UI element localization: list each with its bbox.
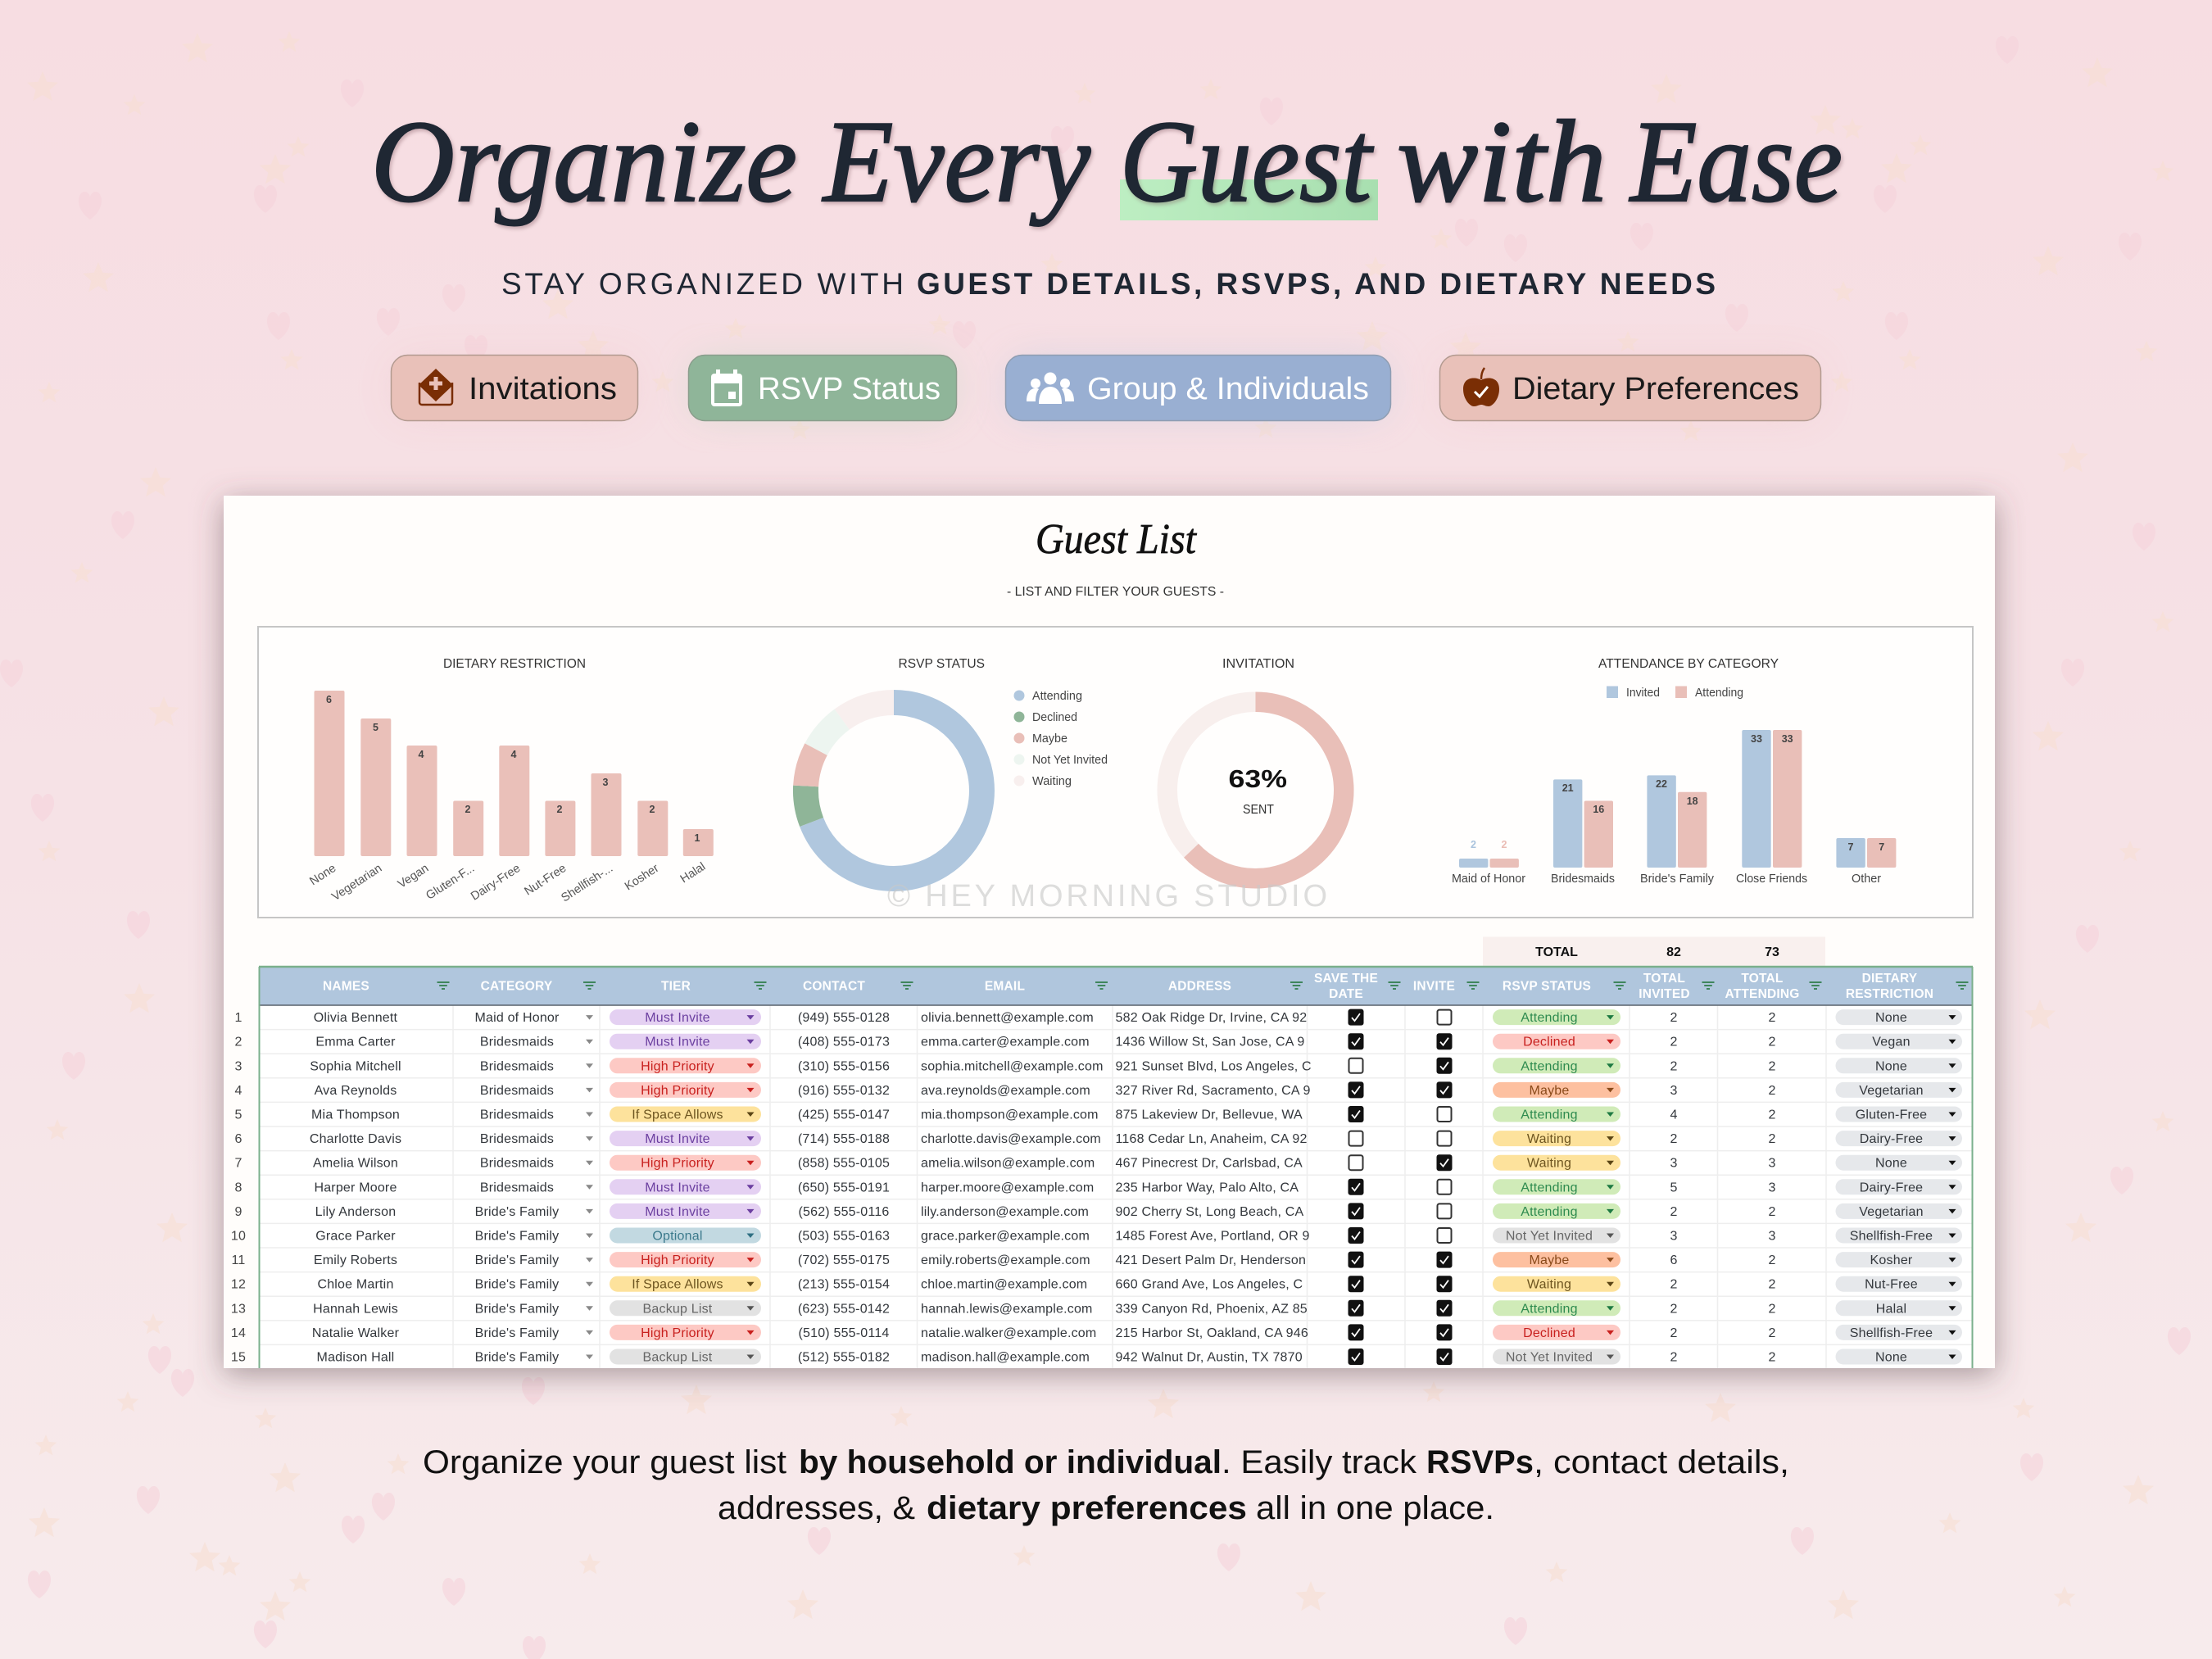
row 8: 235 Harbor Way, Palo Alto, CA xyxy=(1116,1181,1299,1194)
row 5: 2 xyxy=(1768,1108,1776,1122)
table header: NAMES xyxy=(323,980,369,993)
row 11: Bride's Family xyxy=(475,1253,559,1267)
title: Every xyxy=(822,97,1091,226)
row 7: Waiting xyxy=(1527,1157,1571,1171)
row 7: 467 Pinecrest Dr, Carlsbad, CA xyxy=(1116,1157,1303,1171)
bar chart: attendance by category: 22 xyxy=(1656,778,1667,790)
row 3: 3 xyxy=(234,1059,243,1073)
row 9: Attending xyxy=(1521,1205,1578,1219)
bottom description: dietary preferences xyxy=(927,1490,1247,1526)
bar chart: attendance by category: 2 xyxy=(1471,839,1476,850)
row 15: (512) 555-0182 xyxy=(798,1350,890,1365)
row 15: 2 xyxy=(1768,1350,1776,1365)
totals row xyxy=(1483,937,1825,965)
row 7: 3 xyxy=(1670,1157,1678,1171)
row 11: 11 xyxy=(231,1253,246,1267)
row 13: Hannah Lewis xyxy=(313,1302,398,1316)
table xyxy=(231,967,1973,1368)
row 11: 421 Desert Palm Dr, Henderson xyxy=(1116,1253,1306,1267)
sheet title: Guest List xyxy=(1036,516,1197,563)
row 11: Emily Roberts xyxy=(314,1253,397,1267)
bar chart: dietary restriction: 3 xyxy=(603,777,609,788)
row 14: natalie.walker@example.com xyxy=(921,1326,1096,1340)
row 13: 339 Canyon Rd, Phoenix, AZ 85 xyxy=(1116,1302,1308,1316)
row 3: 2 xyxy=(1768,1059,1776,1073)
row 3: None xyxy=(1875,1059,1907,1073)
row 15: madison.hall@example.com xyxy=(921,1350,1090,1365)
row 14: 215 Harbor St, Oakland, CA 946 xyxy=(1116,1326,1308,1340)
bar chart: attendance by category: Maid of Honor xyxy=(1452,872,1525,886)
row 14: Bride's Family xyxy=(475,1326,559,1340)
row 5: If Space Allows xyxy=(632,1108,723,1122)
donut chart: RSVP status: RSVP STATUS xyxy=(898,657,985,671)
row 2: 1436 Willow St, San Jose, CA 9 xyxy=(1116,1036,1304,1049)
table header: TOTAL xyxy=(1741,972,1784,986)
row 4: 4 xyxy=(234,1084,243,1098)
row 5: mia.thompson@example.com xyxy=(921,1108,1099,1122)
row 14: High Priority xyxy=(641,1326,714,1340)
icon: envelope xyxy=(419,369,453,405)
donut chart: RSVP status xyxy=(805,657,1108,878)
bottom description: , contact details, xyxy=(1534,1444,1789,1480)
row 11: (702) 555-0175 xyxy=(798,1253,890,1267)
button: Group & Individuals: Group & Individuals xyxy=(1087,372,1369,406)
bar chart: dietary restriction: Nut-Free xyxy=(522,862,569,899)
row 3 xyxy=(234,1058,1962,1074)
row 6: Charlotte Davis xyxy=(310,1132,401,1146)
row 10: 10 xyxy=(231,1229,246,1244)
row 3: High Priority xyxy=(641,1059,714,1073)
row 2: Bridesmaids xyxy=(480,1036,554,1049)
row 6: Bridesmaids xyxy=(480,1132,554,1146)
bar chart: attendance by category: Close Friends xyxy=(1736,872,1807,886)
row 12 xyxy=(231,1276,1962,1292)
row 6: Dairy-Free xyxy=(1860,1132,1923,1146)
row 5: Bridesmaids xyxy=(480,1108,554,1122)
row 15: None xyxy=(1875,1350,1907,1365)
row 6: 1168 Cedar Ln, Anaheim, CA 92 xyxy=(1116,1132,1308,1146)
row 11 xyxy=(231,1252,1962,1268)
row 5: 875 Lakeview Dr, Bellevue, WA xyxy=(1116,1108,1303,1122)
bar chart: dietary restriction: Vegetarian xyxy=(329,862,384,904)
row 7: amelia.wilson@example.com xyxy=(921,1157,1095,1171)
subtitle xyxy=(501,267,1716,301)
bar chart: attendance by category xyxy=(1452,657,1896,886)
table header: CONTACT xyxy=(803,980,865,993)
totals row: TOTAL xyxy=(1535,945,1578,959)
donut chart: invitation: SENT xyxy=(1243,803,1274,817)
row 12: 12 xyxy=(231,1278,246,1292)
table header xyxy=(259,967,1973,1005)
row 15: 2 xyxy=(1670,1350,1678,1365)
table header: DATE xyxy=(1329,987,1363,1001)
row 12: chloe.martin@example.com xyxy=(921,1278,1087,1292)
bar chart: dietary restriction: Dairy-Free xyxy=(469,862,523,904)
donut chart: invitation: INVITATION xyxy=(1222,657,1294,671)
legend: RSVP status: Declined xyxy=(1032,711,1077,724)
row 8 xyxy=(234,1179,1962,1195)
row 9: lily.anderson@example.com xyxy=(921,1205,1089,1219)
row 10: Not Yet Invited xyxy=(1506,1229,1593,1244)
row 10: Bride's Family xyxy=(475,1229,559,1244)
bar chart: dietary restriction: 6 xyxy=(326,694,332,705)
row 5: Attending xyxy=(1521,1108,1578,1122)
row 14 xyxy=(231,1324,1962,1340)
row 9 xyxy=(234,1203,1962,1219)
row 6: (714) 555-0188 xyxy=(798,1132,890,1146)
row 3: sophia.mitchell@example.com xyxy=(921,1059,1104,1073)
row 2: Emma Carter xyxy=(315,1036,396,1049)
bar chart: attendance by category: ATTENDANCE BY CATEGORY xyxy=(1598,657,1779,671)
bottom description xyxy=(423,1444,1789,1526)
row 8: 8 xyxy=(234,1181,243,1194)
bar chart: attendance by category: 33 xyxy=(1782,733,1793,745)
watermark: © HEY MORNING STUDIO xyxy=(887,879,1327,913)
bar chart: attendance by category: 16 xyxy=(1593,804,1604,815)
row 15: Madison Hall xyxy=(317,1350,394,1365)
bar chart: dietary restriction: 2 xyxy=(557,804,563,815)
legend: attendance: Attending xyxy=(1695,687,1743,700)
row 9: Bride's Family xyxy=(475,1205,559,1219)
row 1 xyxy=(234,1009,1962,1026)
row 15: Backup List xyxy=(643,1350,713,1365)
bar chart: dietary restriction: 4 xyxy=(419,749,424,760)
row 6: Waiting xyxy=(1527,1132,1571,1146)
row 9: 9 xyxy=(234,1205,243,1219)
row 11: High Priority xyxy=(641,1253,714,1267)
row 12: Chloe Martin xyxy=(317,1278,394,1292)
row 9: Lily Anderson xyxy=(315,1205,396,1219)
row 8: 3 xyxy=(1768,1181,1776,1194)
row 14: Natalie Walker xyxy=(312,1326,400,1340)
legend: RSVP status: Not Yet Invited xyxy=(1032,754,1108,767)
row 7: Bridesmaids xyxy=(480,1157,554,1171)
button: Invitations: Invitations xyxy=(469,372,617,406)
row 2: (408) 555-0173 xyxy=(798,1036,890,1049)
row 1: Olivia Bennett xyxy=(314,1011,398,1025)
row 13: Halal xyxy=(1876,1302,1906,1316)
row 1: 1 xyxy=(234,1011,243,1025)
row 5 xyxy=(234,1106,1962,1122)
row 5: 5 xyxy=(234,1108,243,1122)
row 11: emily.roberts@example.com xyxy=(921,1253,1090,1267)
row 12: Nut-Free xyxy=(1865,1278,1918,1292)
row 1: Attending xyxy=(1521,1011,1578,1025)
panel: charts xyxy=(258,627,1973,918)
subtitle: GUEST DETAILS, RSVPS, AND DIETARY NEEDS xyxy=(917,267,1716,301)
icon: people xyxy=(1027,372,1074,404)
row 10: grace.parker@example.com xyxy=(921,1229,1090,1244)
bottom description: addresses, & xyxy=(718,1490,915,1526)
row 8: harper.moore@example.com xyxy=(921,1181,1094,1194)
row 2 xyxy=(234,1033,1962,1049)
row 8: Harper Moore xyxy=(314,1181,397,1194)
row 7: None xyxy=(1875,1157,1907,1171)
icon: apple xyxy=(1463,368,1499,406)
row 10: 3 xyxy=(1670,1229,1678,1244)
button: Invitations xyxy=(392,356,637,421)
bar chart: attendance by category: Bride's Family xyxy=(1640,872,1714,886)
row 7 xyxy=(234,1154,1962,1171)
legend: RSVP status: Maybe xyxy=(1032,732,1067,746)
row 4: 2 xyxy=(1768,1084,1776,1098)
bar chart: attendance by category: 21 xyxy=(1562,782,1574,794)
title: Ease xyxy=(1629,97,1843,226)
row 6: 2 xyxy=(1768,1132,1776,1146)
row 8: Dairy-Free xyxy=(1860,1181,1923,1194)
row 10: Grace Parker xyxy=(315,1229,396,1244)
row 14: 2 xyxy=(1768,1326,1776,1340)
title xyxy=(371,97,1843,226)
legend: attendance xyxy=(1607,687,1743,700)
table header: DIETARY xyxy=(1862,972,1918,986)
row 12: 660 Grand Ave, Los Angeles, C xyxy=(1116,1278,1303,1292)
table header: SAVE THE xyxy=(1314,972,1378,986)
row 8: Must Invite xyxy=(645,1181,710,1194)
legend: RSVP status: Attending xyxy=(1032,690,1082,703)
bar chart: dietary restriction: Halal xyxy=(678,860,708,886)
row 12: (213) 555-0154 xyxy=(798,1278,890,1292)
table header: INVITED xyxy=(1639,987,1690,1001)
row 13: 13 xyxy=(231,1302,246,1316)
button: Group & Individuals xyxy=(1006,356,1391,421)
row 4: (916) 555-0132 xyxy=(798,1084,890,1098)
row 1: 2 xyxy=(1768,1011,1776,1025)
table header: ADDRESS xyxy=(1168,980,1231,993)
subtitle: STAY ORGANIZED WITH xyxy=(501,267,904,301)
row 7: High Priority xyxy=(641,1157,714,1171)
row 1: Must Invite xyxy=(645,1011,710,1025)
sheet subtitle: - LIST AND FILTER YOUR GUESTS - xyxy=(1007,585,1224,599)
row 2: Must Invite xyxy=(645,1036,710,1049)
row 15: 15 xyxy=(231,1350,246,1365)
row 13: 2 xyxy=(1768,1302,1776,1316)
row 15: Not Yet Invited xyxy=(1506,1350,1593,1365)
row 10: 3 xyxy=(1768,1229,1776,1244)
row 1: 582 Oak Ridge Dr, Irvine, CA 92 xyxy=(1116,1011,1307,1025)
row 10: (503) 555-0163 xyxy=(798,1229,890,1244)
row 2: emma.carter@example.com xyxy=(921,1036,1090,1049)
table header: TOTAL xyxy=(1643,972,1685,986)
row 13: Backup List xyxy=(643,1302,713,1316)
row 7: (858) 555-0105 xyxy=(798,1157,890,1171)
row 3: (310) 555-0156 xyxy=(798,1059,890,1073)
row 8: (650) 555-0191 xyxy=(798,1181,890,1194)
highlight behind Guest xyxy=(1120,179,1378,220)
row 10: Optional xyxy=(652,1229,703,1244)
donut chart: invitation: 63% xyxy=(1229,764,1287,793)
bar chart: dietary restriction: 1 xyxy=(695,832,700,844)
row 7: 7 xyxy=(234,1157,243,1171)
bar chart: dietary restriction: Kosher xyxy=(623,862,661,893)
row 11: Kosher xyxy=(1870,1253,1913,1267)
bar chart: attendance by category: 2 xyxy=(1502,839,1507,850)
row 9: (562) 555-0116 xyxy=(798,1205,890,1219)
table header: CATEGORY xyxy=(481,980,553,993)
panel: guest list sheet xyxy=(224,496,1995,1368)
bottom description: . Easily track xyxy=(1222,1444,1417,1480)
row 4: Maybe xyxy=(1529,1084,1570,1098)
row 13: 2 xyxy=(1670,1302,1678,1316)
row 5: Mia Thompson xyxy=(311,1108,400,1122)
bottom description: by household or individual xyxy=(799,1444,1222,1480)
row 14: Shellfish-Free xyxy=(1850,1326,1933,1340)
bottom description: all in one place. xyxy=(1256,1490,1494,1526)
bar chart: dietary restriction: Vegan xyxy=(396,862,431,891)
row 7: 3 xyxy=(1768,1157,1776,1171)
row 4: 3 xyxy=(1670,1084,1678,1098)
table header: INVITE xyxy=(1413,980,1455,993)
bar chart: dietary restriction: Gluten-F... xyxy=(424,862,477,903)
row 14: 14 xyxy=(231,1326,246,1340)
row 5: (425) 555-0147 xyxy=(798,1108,890,1122)
row 3: 921 Sunset Blvd, Los Angeles, C xyxy=(1116,1059,1312,1073)
row 14: 2 xyxy=(1670,1326,1678,1340)
bar chart: dietary restriction: 2 xyxy=(465,804,471,815)
row 3: Sophia Mitchell xyxy=(310,1059,401,1073)
row 10 xyxy=(231,1227,1962,1244)
row 9: 902 Cherry St, Long Beach, CA xyxy=(1116,1205,1304,1219)
title: Guest xyxy=(1120,97,1374,226)
row 4: High Priority xyxy=(641,1084,714,1098)
icon: calendar xyxy=(711,369,742,406)
row 12: 2 xyxy=(1768,1278,1776,1292)
button: RSVP Status xyxy=(688,356,957,421)
table header: RSVP STATUS xyxy=(1503,980,1591,993)
row 12: If Space Allows xyxy=(632,1278,723,1292)
row 1: olivia.bennett@example.com xyxy=(921,1011,1094,1025)
row 6: charlotte.davis@example.com xyxy=(921,1132,1101,1146)
row 12: Waiting xyxy=(1527,1278,1571,1292)
bar chart: attendance by category: 33 xyxy=(1751,733,1762,745)
title: Organize xyxy=(371,97,797,226)
row 1: 2 xyxy=(1670,1011,1678,1025)
row 12: 2 xyxy=(1670,1278,1678,1292)
totals row: 73 xyxy=(1765,945,1779,959)
row 13: Bride's Family xyxy=(475,1302,559,1316)
bar chart: dietary restriction xyxy=(307,657,714,904)
row 2: Declined xyxy=(1523,1036,1575,1049)
row 2: 2 xyxy=(1670,1036,1678,1049)
bar chart: dietary restriction: 2 xyxy=(650,804,655,815)
table header: RESTRICTION xyxy=(1846,987,1933,1001)
bar chart: attendance by category: 18 xyxy=(1687,796,1698,807)
row 6 xyxy=(234,1131,1962,1146)
bottom description: RSVPs xyxy=(1426,1444,1534,1480)
row 1: None xyxy=(1875,1011,1907,1025)
bar chart: attendance by category: Bridesmaids xyxy=(1551,872,1615,886)
row 4: Bridesmaids xyxy=(480,1084,554,1098)
row 15 xyxy=(231,1349,1962,1365)
row 8: Bridesmaids xyxy=(480,1181,554,1194)
bar chart: dietary restriction: Shellfish-... xyxy=(559,862,615,904)
row 2: Vegan xyxy=(1872,1036,1911,1049)
row 6: 6 xyxy=(234,1132,243,1146)
row 8: Attending xyxy=(1521,1181,1578,1194)
legend: RSVP status xyxy=(1014,690,1108,788)
row 14: (510) 555-0114 xyxy=(798,1326,890,1340)
table header: EMAIL xyxy=(985,980,1025,993)
row 9: Must Invite xyxy=(645,1205,710,1219)
row 4: Vegetarian xyxy=(1859,1084,1924,1098)
row 9: 2 xyxy=(1670,1205,1678,1219)
row 9: 2 xyxy=(1768,1205,1776,1219)
row 1: Maid of Honor xyxy=(474,1011,560,1025)
button: Dietary Preferences: Dietary Preferences xyxy=(1512,372,1799,406)
bar chart: attendance by category: Other xyxy=(1852,872,1881,886)
title: with xyxy=(1397,97,1607,226)
row 2: 2 xyxy=(1768,1036,1776,1049)
row 3: Bridesmaids xyxy=(480,1059,554,1073)
row 4: Ava Reynolds xyxy=(315,1084,397,1098)
donut chart: invitation xyxy=(1167,657,1344,878)
row 11: 6 xyxy=(1670,1253,1678,1267)
table header: TIER xyxy=(661,980,691,993)
row 11: Maybe xyxy=(1529,1253,1570,1267)
row 8: 5 xyxy=(1670,1181,1678,1194)
row 3: 2 xyxy=(1670,1059,1678,1073)
bar chart: dietary restriction: 4 xyxy=(511,749,517,760)
row 4: 327 River Rd, Sacramento, CA 9 xyxy=(1116,1084,1311,1098)
legend: attendance: Invited xyxy=(1626,687,1660,700)
row 13 xyxy=(231,1300,1962,1317)
row 14: Declined xyxy=(1523,1326,1575,1340)
row 15: Bride's Family xyxy=(475,1350,559,1365)
row 10: 1485 Forest Ave, Portland, OR 9 xyxy=(1116,1229,1310,1244)
bottom description: Organize your guest list xyxy=(423,1444,786,1480)
row 4: ava.reynolds@example.com xyxy=(921,1084,1090,1098)
table header: ATTENDING xyxy=(1725,987,1800,1001)
row 4 xyxy=(234,1081,1962,1098)
legend: RSVP status: Waiting xyxy=(1032,775,1072,788)
bar chart: dietary restriction: None xyxy=(307,862,338,888)
row 2: 2 xyxy=(234,1036,243,1049)
row 6: Must Invite xyxy=(645,1132,710,1146)
bar chart: attendance by category: 7 xyxy=(1879,841,1884,853)
button: RSVP Status: RSVP Status xyxy=(758,372,941,406)
row 13: Attending xyxy=(1521,1302,1578,1316)
row 11: 2 xyxy=(1768,1253,1776,1267)
row 15: 942 Walnut Dr, Austin, TX 7870 xyxy=(1116,1350,1303,1365)
row 1: (949) 555-0128 xyxy=(798,1011,890,1025)
bar chart: attendance by category: 7 xyxy=(1848,841,1854,853)
row 5: 4 xyxy=(1670,1108,1678,1122)
row 7: Amelia Wilson xyxy=(313,1157,398,1171)
row 10: Shellfish-Free xyxy=(1850,1229,1933,1244)
totals row: 82 xyxy=(1666,945,1681,959)
row 13: hannah.lewis@example.com xyxy=(921,1302,1093,1316)
row 3: Attending xyxy=(1521,1059,1578,1073)
button: Dietary Preferences xyxy=(1440,356,1820,421)
row 6: 2 xyxy=(1670,1132,1678,1146)
row 9: Vegetarian xyxy=(1859,1205,1924,1219)
row 12: Bride's Family xyxy=(475,1278,559,1292)
row 13: (623) 555-0142 xyxy=(798,1302,890,1316)
row 5: Gluten-Free xyxy=(1856,1108,1927,1122)
bar chart: dietary restriction: 5 xyxy=(373,722,378,733)
bar chart: dietary restriction: DIETARY RESTRICTION xyxy=(443,657,586,671)
